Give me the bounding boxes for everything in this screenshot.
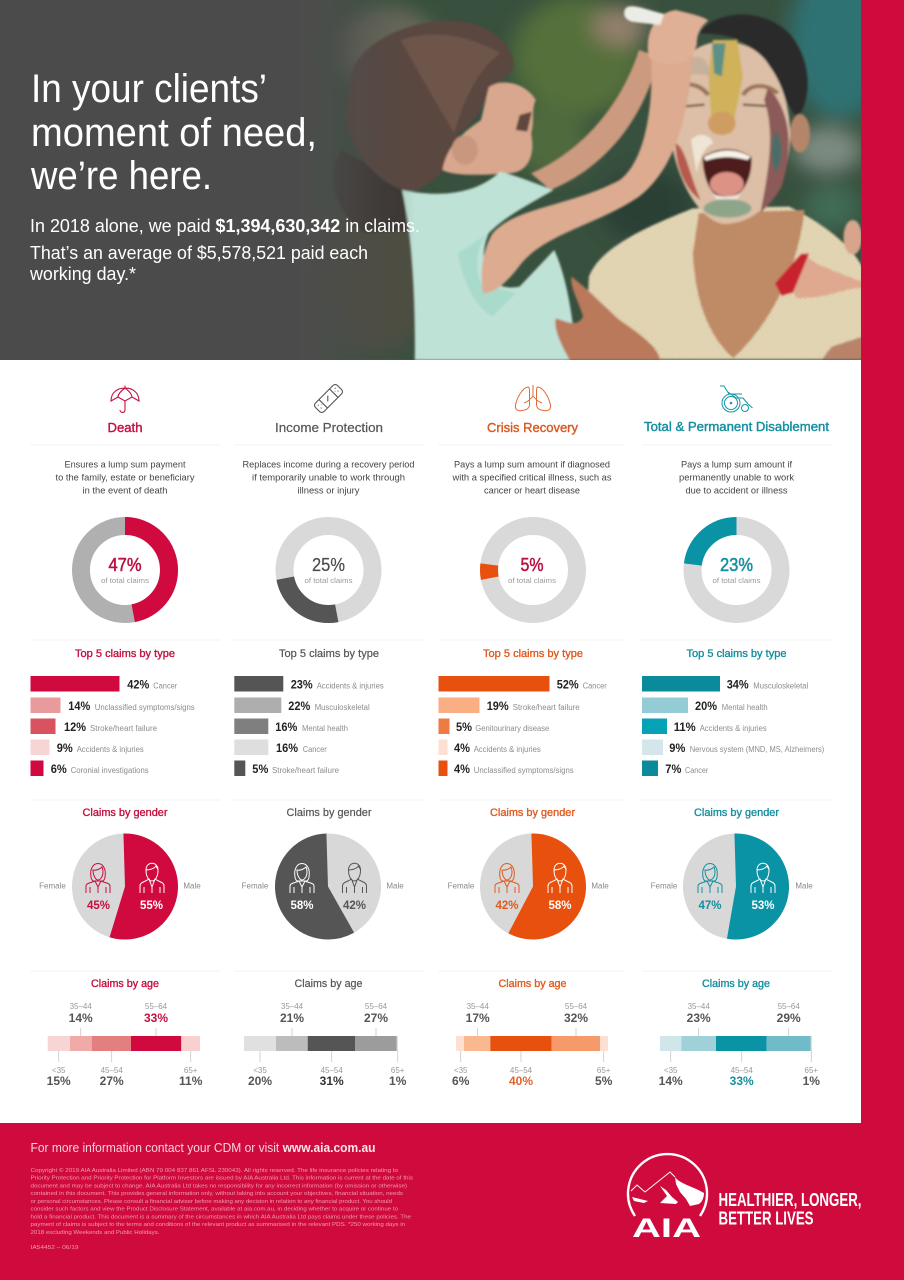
description: due to accident or illness <box>686 486 788 496</box>
pie chart: gender <box>242 834 404 940</box>
bar chart: top 5 claims: Mental health <box>722 703 768 712</box>
heading: gender: Claims by gender <box>694 807 779 819</box>
pie chart: gender: 47% <box>698 900 722 912</box>
bar chart: top 5 claims: 12% <box>64 720 86 734</box>
donut chart: 47% of total claims: 47% <box>108 555 142 575</box>
donut chart: 25% of total claims: of total claims <box>304 576 353 585</box>
tagline <box>718 1190 862 1228</box>
bar chart: top 5 claims: Accidents & injuries <box>77 745 144 754</box>
stacked bar: age: <35 <box>664 1066 678 1075</box>
legal copy <box>30 1167 413 1251</box>
hero subtitle <box>29 216 420 284</box>
pie chart: gender: 58% <box>290 900 314 912</box>
pie chart: gender: Male <box>183 882 201 890</box>
bar chart: top 5 claims: 5% <box>252 762 269 776</box>
donut chart: 47% of total claims <box>81 526 169 614</box>
heading: Top 5 claims: Top 5 claims by type <box>686 648 786 660</box>
donut chart: 47% of total claims: of total claims <box>101 576 149 585</box>
hero title <box>30 67 317 198</box>
bar chart: top 5 claims: Coronial investigations <box>71 766 149 775</box>
bar chart: top 5 claims: Unclassified symptoms/signs <box>474 766 574 775</box>
heading: gender: Claims by gender <box>82 807 168 819</box>
bar chart: top 5 claims: 23% <box>291 678 313 692</box>
panel: Total & Permanent Disablement <box>642 386 829 1088</box>
stacked bar: age: 1% <box>389 1074 407 1088</box>
girl arms <box>531 50 658 190</box>
right brand band <box>861 0 904 1280</box>
stacked bar: age: 29% <box>777 1011 801 1025</box>
stacked bar: age: 23% <box>687 1011 711 1025</box>
stacked bar: age: 14% <box>69 1011 93 1025</box>
description: cancer or heart disease <box>484 486 580 496</box>
stacked bar: age: 40% <box>509 1074 533 1088</box>
bar chart: top 5 claims: Accidents & injuries <box>700 724 767 733</box>
stacked bar: age: 33% <box>730 1074 754 1088</box>
woman's hand <box>555 277 660 360</box>
dress <box>402 172 577 360</box>
bar chart: top 5 claims <box>234 676 384 776</box>
stacked bar: age: 35–44 <box>467 1002 489 1011</box>
legal copy: contained in this document. This provides general information only, without taking into account your objectives, financial situation, needs <box>30 1191 403 1197</box>
heading: Income Protection: Income Protection <box>275 420 383 435</box>
stacked bar: age: 65+ <box>184 1066 198 1075</box>
description: permanently unable to work <box>679 472 795 482</box>
stacked bar: age: 45–54 <box>101 1066 123 1075</box>
legal copy: hold a financial product. This document is a summary of the circumstances in which AIA Australia Ltd pays claims under these policies. The <box>30 1214 411 1220</box>
bar chart: top 5 claims: Genitourinary disease <box>475 724 550 733</box>
stacked bar: age: 65+ <box>391 1066 405 1075</box>
pie chart: gender: Male <box>591 882 609 890</box>
legal copy: Copyright © 2019 AIA Australia Limited (ABN 79 004 837 861 AFSL 230043). All rights reserved. The life insurance policies relating to <box>30 1167 398 1174</box>
pie chart: gender: Female <box>448 882 475 890</box>
legal copy: Priority Protection and Priority Protection for Platform Investors are issued by AIA Australia Ltd. This information is current at the date of this <box>30 1176 413 1182</box>
pie chart: gender: 42% <box>495 900 519 912</box>
stacked bar: age: 55–64 <box>778 1002 800 1011</box>
hero subtitle: working day.* <box>29 264 136 284</box>
stacked bar: age: 20% <box>248 1074 272 1088</box>
stacked bar: age: <35 <box>253 1066 267 1075</box>
stacked bar: age: 6% <box>452 1074 470 1088</box>
bar chart: top 5 claims: Mental health <box>302 724 348 733</box>
description: Pays a lump sum amount if <box>681 460 793 470</box>
tagline: BETTER LIVES <box>718 1208 814 1228</box>
bar chart: top 5 claims: Stroke/heart failure <box>272 766 340 775</box>
stacked bar: age <box>244 1002 407 1088</box>
bar chart: top 5 claims: Accidents & injuries <box>317 682 384 690</box>
bar chart: top 5 claims: Cancer <box>153 682 178 690</box>
stacked bar: age: 31% <box>320 1074 344 1088</box>
heading: Total & Permanent Disablement: Total & Permanent Disablement <box>644 419 829 434</box>
icon: bandage <box>313 383 344 414</box>
description <box>451 460 612 496</box>
description: with a specified critical illness, such as <box>451 472 612 482</box>
hero photo: girl painting woman's face <box>0 0 889 360</box>
stacked bar: age <box>452 1002 613 1088</box>
bar chart: top 5 claims: 19% <box>487 699 509 713</box>
pie chart: gender: 53% <box>751 900 775 912</box>
pie chart: gender: Female <box>39 882 66 890</box>
contact line: For more information contact your CDM or visit www.aia.com.au <box>30 1140 376 1155</box>
donut chart: 5% of total claims: of total claims <box>508 576 556 585</box>
legal copy: document and may be subject to change. AIA Australia Ltd takes no responsibility for any incorrect information (by omission or otherwise) <box>30 1184 407 1190</box>
stacked bar: age: 45–54 <box>731 1066 753 1075</box>
bar chart: top 5 claims: 5% <box>456 720 472 734</box>
bar chart: top 5 claims: 16% <box>275 720 298 734</box>
heading: Top 5 claims: Top 5 claims by type <box>483 648 583 660</box>
legal copy: payment of claims is subject to the terms and conditions of the relevant product as summarised in the relevant PDS. *250 working days in <box>30 1222 405 1228</box>
legal copy: IA54452 – 06/19 <box>30 1245 78 1251</box>
hero subtitle: That’s an average of $5,578,521 paid each <box>30 243 368 263</box>
stacked bar: age: 14% <box>659 1074 683 1088</box>
stacked bar: age: 45–54 <box>321 1066 343 1075</box>
bar chart: top 5 claims: Musculoskeletal <box>753 682 809 690</box>
donut chart: 5% of total claims: 5% <box>520 555 544 575</box>
logo: AIA <box>628 1154 707 1243</box>
stacked bar: age: <35 <box>52 1066 66 1075</box>
stacked bar: age: 33% <box>144 1011 168 1025</box>
heading: Crisis Recovery: Crisis Recovery <box>487 420 578 435</box>
donut chart: 23% of total claims: 23% <box>720 555 753 575</box>
heading: gender: Claims by gender <box>490 807 575 819</box>
icon: wheelchair <box>720 386 752 412</box>
pie chart: gender: Female <box>651 882 678 890</box>
pie chart: gender: Male <box>795 882 813 890</box>
stacked bar: age: 21% <box>280 1011 304 1025</box>
stacked bar: age: 55–64 <box>145 1002 168 1011</box>
description: Replaces income during a recovery period <box>242 460 414 470</box>
bar chart: top 5 claims: 16% <box>276 741 298 755</box>
heading: Death: Death <box>108 420 142 435</box>
donut chart: 25% of total claims <box>284 526 372 614</box>
bar chart: top 5 claims: Nervous system (MND, MS, Alzheimers) <box>690 745 825 754</box>
bar chart: top 5 claims: 34% <box>727 678 749 692</box>
pie chart: gender <box>651 834 813 940</box>
pie chart: gender: Male <box>386 882 404 890</box>
bar chart: top 5 claims: Musculoskeletal <box>315 703 370 712</box>
heading: age: Claims by age <box>702 978 770 990</box>
heading: Top 5 claims: Top 5 claims by type <box>279 648 379 660</box>
heading: age: Claims by age <box>91 978 159 990</box>
hero title: we’re here. <box>30 154 212 198</box>
pie chart: gender: 45% <box>87 900 110 912</box>
bar chart: top 5 claims: 20% <box>695 699 717 713</box>
stacked bar: age <box>47 1002 203 1088</box>
description <box>679 460 795 496</box>
legal copy: 2018 excluding Weekends and Public Holidays. <box>30 1230 160 1236</box>
stacked bar: age: 65+ <box>597 1066 611 1075</box>
heading: age: Claims by age <box>294 978 362 990</box>
child's hand and red crayon <box>844 220 862 255</box>
stacked bar: age: 35–44 <box>688 1002 710 1011</box>
panel: Crisis Recovery <box>438 385 613 1088</box>
bar chart: top 5 claims: 52% <box>557 678 579 692</box>
bar chart: top 5 claims <box>438 676 607 776</box>
stacked bar: age: 1% <box>803 1074 820 1088</box>
description: Pays a lump sum amount if diagnosed <box>454 460 610 470</box>
donut chart: 23% of total claims <box>692 526 780 614</box>
stacked bar: age: 55–64 <box>365 1002 388 1011</box>
bar chart: top 5 claims: 6% <box>51 762 67 776</box>
girl hair <box>333 150 406 233</box>
stacked bar: age: 35–44 <box>70 1002 92 1011</box>
bar chart: top 5 claims: 4% <box>454 762 470 776</box>
bar chart: top 5 claims: Stroke/heart failure <box>90 724 158 733</box>
stacked bar: age: 55–64 <box>565 1002 588 1011</box>
stacked bar: age: 35–44 <box>281 1002 304 1011</box>
legal copy: consider such factors and view the Product Disclosure Statement, available at aia.com.au, in deciding whether to acquire or continue to <box>30 1207 398 1213</box>
bar chart: top 5 claims: 42% <box>127 678 150 692</box>
bar chart: top 5 claims: 4% <box>454 741 470 755</box>
panel: Income Protection <box>234 383 414 1088</box>
stacked bar: age: 27% <box>100 1074 124 1088</box>
footer band <box>0 1123 904 1280</box>
heading: gender: Claims by gender <box>286 807 372 819</box>
bar chart: top 5 claims: 9% <box>57 741 73 755</box>
icon: lungs <box>515 385 551 411</box>
bar chart: top 5 claims: 11% <box>674 720 696 734</box>
stacked bar: age: <35 <box>454 1066 468 1075</box>
bar chart: top 5 claims: Stroke/heart failure <box>513 703 580 712</box>
stacked bar: age: 15% <box>47 1074 71 1088</box>
bar chart: top 5 claims: Accidents & injuries <box>474 745 541 754</box>
bar chart: top 5 claims: Cancer <box>685 766 709 775</box>
stacked bar: age: 27% <box>364 1011 388 1025</box>
section dividers <box>30 445 832 971</box>
pie chart: gender <box>39 834 201 940</box>
pie chart: gender: 42% <box>343 900 366 912</box>
hero title: In your clients’ <box>31 67 267 111</box>
bar chart: top 5 claims: Cancer <box>303 745 327 754</box>
bar chart: top 5 claims: Cancer <box>583 682 607 690</box>
panel: Death <box>30 386 203 1088</box>
stacked bar: age: 11% <box>179 1074 203 1088</box>
bar chart: top 5 claims: 9% <box>669 741 686 755</box>
description: illness or injury <box>298 486 360 496</box>
stacked bar: age: 45–54 <box>510 1066 533 1075</box>
bar chart: top 5 claims: 14% <box>68 699 91 713</box>
description: Ensures a lump sum payment <box>64 460 186 470</box>
girl face <box>443 83 536 175</box>
bar chart: top 5 claims: 7% <box>665 762 682 776</box>
pie chart: gender <box>448 834 609 940</box>
heading: age: Claims by age <box>498 978 566 990</box>
bar chart: top 5 claims <box>30 676 195 776</box>
pie chart: gender: 58% <box>548 900 572 912</box>
description <box>56 460 195 496</box>
hero title: moment of need, <box>31 111 317 155</box>
description <box>242 460 414 496</box>
description: to the family, estate or beneficiary <box>56 472 195 482</box>
stacked bar: age <box>659 1002 820 1088</box>
icon: umbrella <box>111 386 139 412</box>
bar chart: top 5 claims <box>642 676 825 776</box>
logo: AIA: AIA <box>632 1213 701 1243</box>
donut chart: 5% of total claims <box>489 526 577 614</box>
bar chart: top 5 claims: Unclassified symptoms/signs <box>95 703 195 712</box>
description: if temporarily unable to work through <box>252 472 405 482</box>
description: in the event of death <box>82 486 168 496</box>
stacked bar: age: 32% <box>564 1011 588 1025</box>
legal copy: or personal circumstances. Please consult a financial adviser before making any decision in relation to any financial product. You should <box>30 1199 392 1205</box>
stacked bar: age: 17% <box>466 1011 490 1025</box>
donut chart: 23% of total claims: of total claims <box>712 576 761 585</box>
hero subtitle: In 2018 alone, we paid $1,394,630,342 in claims. <box>30 216 420 236</box>
bar chart: top 5 claims: 22% <box>288 699 311 713</box>
heading: Top 5 claims: Top 5 claims by type <box>75 648 175 660</box>
donut chart: 25% of total claims: 25% <box>312 555 345 575</box>
woman <box>585 207 862 359</box>
pie chart: gender: Female <box>242 882 269 890</box>
pie chart: gender: 55% <box>140 900 163 912</box>
stacked bar: age: 5% <box>595 1074 613 1088</box>
stacked bar: age: 65+ <box>805 1066 818 1075</box>
